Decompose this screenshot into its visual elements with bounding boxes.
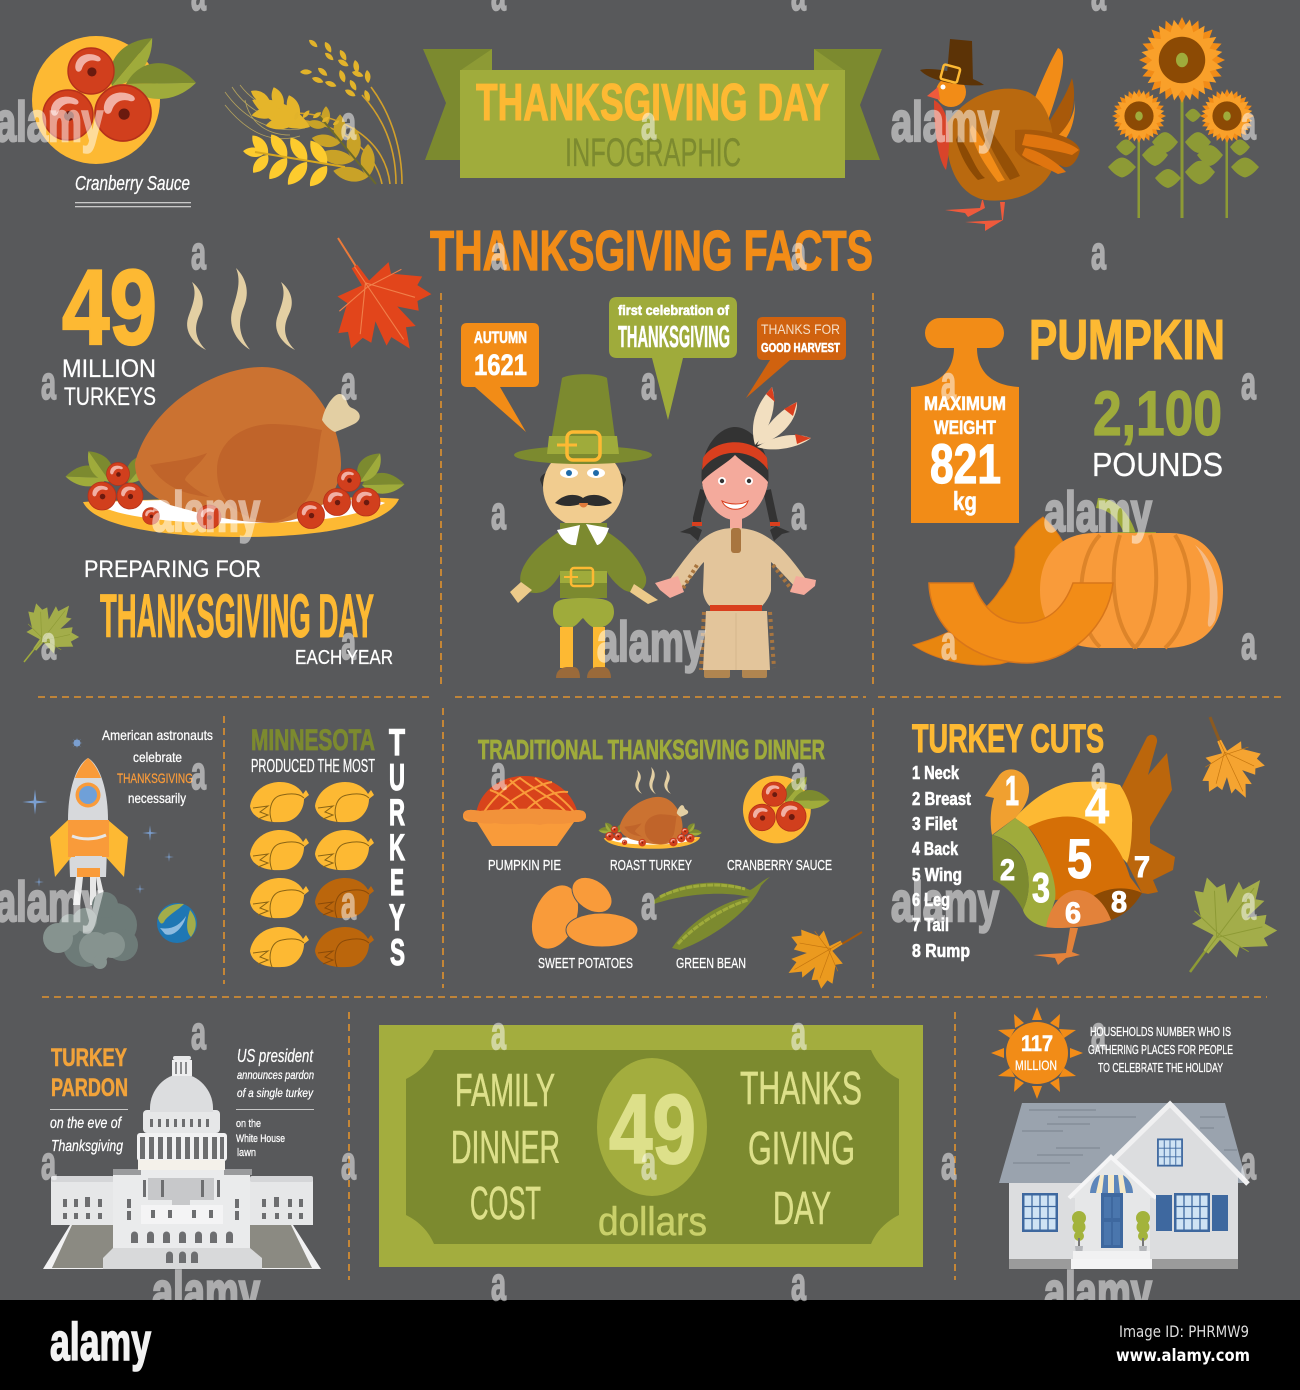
- text: households number: [1088, 1024, 1233, 1075]
- list: cuts legend: 7 Tail: [912, 915, 949, 935]
- icon: weight with maximum weight text: 821: [930, 432, 1001, 495]
- icon: cranberry sauce with caption: [32, 28, 196, 207]
- text: preparing for thanksgiving day each year: PREPARING FOR: [84, 556, 261, 583]
- icon: pumpkin with slices: [913, 498, 1223, 665]
- numbers on the cuts: 7: [1134, 851, 1150, 884]
- panel: 49 million turkeys: [12, 238, 452, 669]
- text: alamy: [891, 90, 999, 153]
- text: a: [941, 1136, 956, 1189]
- heading: traditional thanksgiving dinner: TRADITIONAL THANKSGIVING DINNER: [478, 734, 825, 765]
- callout: autumn 1621: AUTUMN: [474, 328, 527, 347]
- panel: minnesota turkeys: [250, 722, 405, 973]
- text: alamy: [152, 1260, 260, 1323]
- label: million turkeys: MILLION: [62, 355, 156, 383]
- icon: mini roast turkey: ROAST TURKEY: [610, 857, 692, 874]
- heading: thanksgiving facts: THANKSGIVING FACTS: [430, 219, 873, 283]
- text: thanks giving day: THANKS: [740, 1062, 862, 1114]
- vertical text: turkeys: T: [389, 722, 405, 763]
- heading: minnesota: MINNESOTA: [251, 724, 375, 757]
- numbers on the cuts: 3: [1032, 864, 1050, 911]
- text: a: [941, 356, 956, 409]
- icon: capitol building: [43, 1056, 321, 1269]
- footer branding: Image ID: PHRMW9: [1119, 1322, 1249, 1341]
- text: a: [41, 356, 56, 409]
- text: a: [341, 1136, 356, 1189]
- text: us president: of a single turkey: [237, 1086, 314, 1100]
- text: turkey pardon: TURKEY: [51, 1044, 127, 1072]
- text: households number: HOUSEHOLDS NUMBER WHO IS: [1090, 1024, 1231, 1039]
- icon: mini cranberry: [727, 771, 832, 874]
- text: thanks giving day: DAY: [773, 1182, 831, 1234]
- icon: weight with maximum weight text: [911, 318, 1019, 523]
- text: us president: [236, 1046, 314, 1159]
- text: a: [491, 486, 506, 539]
- text: a: [341, 876, 356, 929]
- heading: turkey cuts: TURKEY CUTS: [912, 717, 1104, 761]
- list: cuts legend: 6 Leg: [912, 890, 950, 910]
- icons: stars: [22, 735, 174, 894]
- text: a: [1091, 226, 1106, 279]
- callout: first celebration of thanksgiving: THANKSGIVING: [618, 319, 730, 354]
- text: a: [641, 96, 656, 149]
- panel: dollar bill family dinner cost: [379, 1025, 923, 1267]
- text: thanks giving day: [740, 1062, 862, 1234]
- numbers on the cuts: [1000, 767, 1150, 930]
- icon: weight with maximum weight text: WEIGHT: [934, 418, 996, 439]
- text: a: [341, 356, 356, 409]
- caption: cranberry sauce: Cranberry Sauce: [75, 173, 190, 195]
- icon: mini roast turkey: [598, 767, 702, 874]
- icon: weight with maximum weight text: MAXIMUM: [924, 394, 1006, 415]
- callout: first celebration of thanksgiving: first celebration of: [618, 302, 729, 318]
- text: family dinner cost: DINNER: [451, 1121, 560, 1173]
- vertical text: turkeys: R: [389, 792, 405, 833]
- icon: pilgrim turkey: [920, 39, 1080, 231]
- text: preparing for thanksgiving day each year: [84, 556, 393, 669]
- list: cuts legend: 1 Neck: [912, 763, 960, 783]
- text: a: [791, 486, 806, 539]
- stat: 49 dollars: dollars: [598, 1200, 707, 1244]
- icon: large green leaf: [1169, 852, 1297, 980]
- stat: 2,100 pounds: [1092, 379, 1223, 483]
- text: turkey pardon: PARDON: [51, 1074, 128, 1102]
- panel: first celebration: [461, 297, 846, 678]
- numbers on the cuts: 1: [1005, 767, 1019, 814]
- icon: pumpkin pie: PUMPKIN PIE: [488, 857, 561, 874]
- footer branding: www.alamy.com: [1116, 1346, 1250, 1366]
- text: us president: on the: [236, 1118, 261, 1130]
- text: a: [791, 226, 806, 279]
- text: american astronauts: celebrate: [133, 749, 182, 765]
- text: american astronauts: THANKSGIVING: [117, 770, 193, 786]
- numbers on the cuts: 6: [1065, 897, 1081, 930]
- text: a: [1091, 746, 1106, 799]
- panel: traditional dinner: [463, 734, 862, 1000]
- list: cuts legend: 5 Wing: [912, 865, 962, 885]
- title banner: [423, 49, 882, 178]
- stat: 2,100 pounds: POUNDS: [1092, 446, 1223, 483]
- numbers on the cuts: 4: [1085, 780, 1109, 834]
- icon: sun with 117 million: MILLION: [1015, 1057, 1057, 1073]
- pictogram: turkey counts: [250, 782, 374, 967]
- title text: THANKSGIVING DAY: [476, 74, 829, 132]
- text: a: [1091, 1006, 1106, 1059]
- text: a: [491, 746, 506, 799]
- text: turkey pardon: on the eve of: [50, 1115, 122, 1132]
- list: cuts legend: 4 Back: [912, 839, 959, 859]
- icon: earth: [157, 903, 197, 943]
- text: households number: GATHERING PLACES FOR PEOPLE: [1088, 1042, 1233, 1057]
- text: a: [191, 226, 206, 279]
- text: a: [41, 616, 56, 669]
- panel: 49 million turkeys: THANKSGIVING DAY: [100, 582, 374, 650]
- text: a: [491, 1006, 506, 1059]
- oval medallion: [597, 1058, 707, 1196]
- list: cuts legend: 2 Breast: [912, 789, 971, 809]
- text: a: [341, 616, 356, 669]
- icon: green beans: [654, 877, 770, 972]
- numbers on the cuts: 2: [1000, 854, 1015, 887]
- icon: weight with maximum weight text: kg: [953, 486, 977, 516]
- heading: pumpkin: PUMPKIN: [1029, 308, 1225, 372]
- text: a: [1241, 356, 1256, 409]
- numbers on the cuts: 8: [1111, 886, 1127, 919]
- callout: thanks for good harvest: [746, 317, 846, 398]
- callout: thanks for good harvest: GOOD HARVEST: [761, 340, 840, 355]
- text: a: [641, 1136, 656, 1189]
- icon: sweet potatoes: [523, 870, 638, 972]
- text: us president: White House: [236, 1133, 285, 1145]
- text: a: [641, 356, 656, 409]
- panel: pumpkin: [911, 308, 1225, 665]
- icon: sun with 117 million: 117: [1021, 1031, 1053, 1056]
- icon: rocket: [50, 758, 128, 905]
- icon: rocket smoke: [43, 892, 138, 969]
- text: preparing for thanksgiving day each year: EACH YEAR: [295, 647, 393, 669]
- icon: sweet potatoes: SWEET POTATOES: [538, 955, 633, 972]
- stat: 49 dollars: 49: [609, 1074, 696, 1184]
- stat: 49 dollars: [598, 1074, 707, 1244]
- list: cuts legend: 8 Rump: [912, 941, 970, 961]
- icon: sun with 117 million: [991, 1007, 1083, 1099]
- icon: red maple leaf: [312, 238, 452, 377]
- text: households number: TO CELEBRATE THE HOLIDAY: [1098, 1060, 1223, 1075]
- text: a: [1241, 616, 1256, 669]
- icon: steam: [187, 268, 295, 350]
- text: american astronauts: American astronauts: [102, 727, 213, 743]
- icon: pumpkin pie: [463, 776, 586, 874]
- panel: turkey pardon: [43, 1044, 321, 1269]
- text: a: [941, 616, 956, 669]
- callout: first celebration of thanksgiving: [609, 297, 737, 420]
- figure: pilgrim: [510, 374, 658, 678]
- icon: wheat bundle: [225, 38, 402, 190]
- panel: astronauts: [22, 727, 213, 969]
- icon: house: [999, 1102, 1248, 1269]
- text: a: [191, 746, 206, 799]
- text: turkey pardon: Thanksgiving: [51, 1138, 123, 1155]
- text: family dinner cost: FAMILY: [455, 1064, 555, 1116]
- icon: orange leaf: [773, 915, 862, 1000]
- text: us president: announces pardon: [237, 1068, 314, 1082]
- vertical text: turkeys: U: [389, 757, 405, 798]
- callout: thanks for good harvest: THANKS FOR: [761, 321, 840, 337]
- text: family dinner cost: COST: [470, 1177, 541, 1229]
- text: a: [1241, 96, 1256, 149]
- text: alamy: [891, 870, 999, 933]
- text: a: [791, 1257, 806, 1310]
- text: a: [1241, 1136, 1256, 1189]
- label: million turkeys: TURKEYS: [64, 383, 156, 411]
- text: thanks giving day: GIVING: [748, 1122, 855, 1174]
- text: a: [41, 1136, 56, 1189]
- label: million turkeys: [62, 355, 156, 411]
- text: a: [341, 96, 356, 149]
- list: cuts legend: [912, 763, 971, 961]
- icon: sunflowers: [1108, 12, 1259, 218]
- numbers on the cuts: 5: [1067, 827, 1092, 890]
- text: a: [191, 1006, 206, 1059]
- vertical text: turkeys: E: [390, 862, 404, 903]
- panel: households: [991, 1007, 1248, 1269]
- text: a: [791, 1006, 806, 1059]
- black footer band: [0, 1300, 1300, 1390]
- list: cuts legend: 3 Filet: [912, 814, 957, 834]
- text: turkey pardon: [50, 1044, 128, 1155]
- icon: green leaf: [12, 588, 92, 667]
- stat: 2,100 pounds: 2,100: [1093, 379, 1222, 449]
- text: us president: lawn: [237, 1147, 256, 1159]
- vertical text: turkeys: Y: [389, 897, 405, 938]
- subheading: produced the most: PRODUCED THE MOST: [251, 756, 375, 776]
- text: a: [491, 1257, 506, 1310]
- diagram: turkey cuts: [985, 735, 1175, 965]
- text: family dinner cost: [451, 1064, 560, 1229]
- text: american astronauts: necessarily: [128, 790, 186, 806]
- text: a: [641, 876, 656, 929]
- icon: green beans: GREEN BEAN: [676, 955, 746, 972]
- icon: orange maple leaf: [1190, 717, 1275, 811]
- vertical text: turkeys: [389, 722, 405, 973]
- text: a: [491, 226, 506, 279]
- vertical text: turkeys: S: [390, 932, 405, 973]
- text: american astronauts: [102, 727, 213, 806]
- text: alamy: [597, 610, 705, 673]
- footer branding: alamy: [50, 1313, 151, 1372]
- subtitle text: INFOGRAPHIC: [565, 131, 741, 175]
- text: alamy: [152, 480, 260, 543]
- callout: autumn 1621: 1621: [474, 349, 527, 382]
- callout: autumn 1621: [461, 323, 539, 432]
- panel: turkey cuts: [912, 717, 1297, 980]
- text: alamy: [1044, 480, 1152, 543]
- figure: native woman: [655, 387, 816, 678]
- footer branding: [50, 1313, 1250, 1372]
- icon: mini cranberry: CRANBERRY SAUCE: [727, 857, 832, 874]
- vertical text: turkeys: K: [389, 827, 405, 868]
- icon: roast turkey on platter: [65, 367, 405, 537]
- text: a: [791, 746, 806, 799]
- text: a: [1241, 876, 1256, 929]
- text: us president: US president: [237, 1046, 314, 1066]
- stat: 49: 49: [62, 247, 157, 367]
